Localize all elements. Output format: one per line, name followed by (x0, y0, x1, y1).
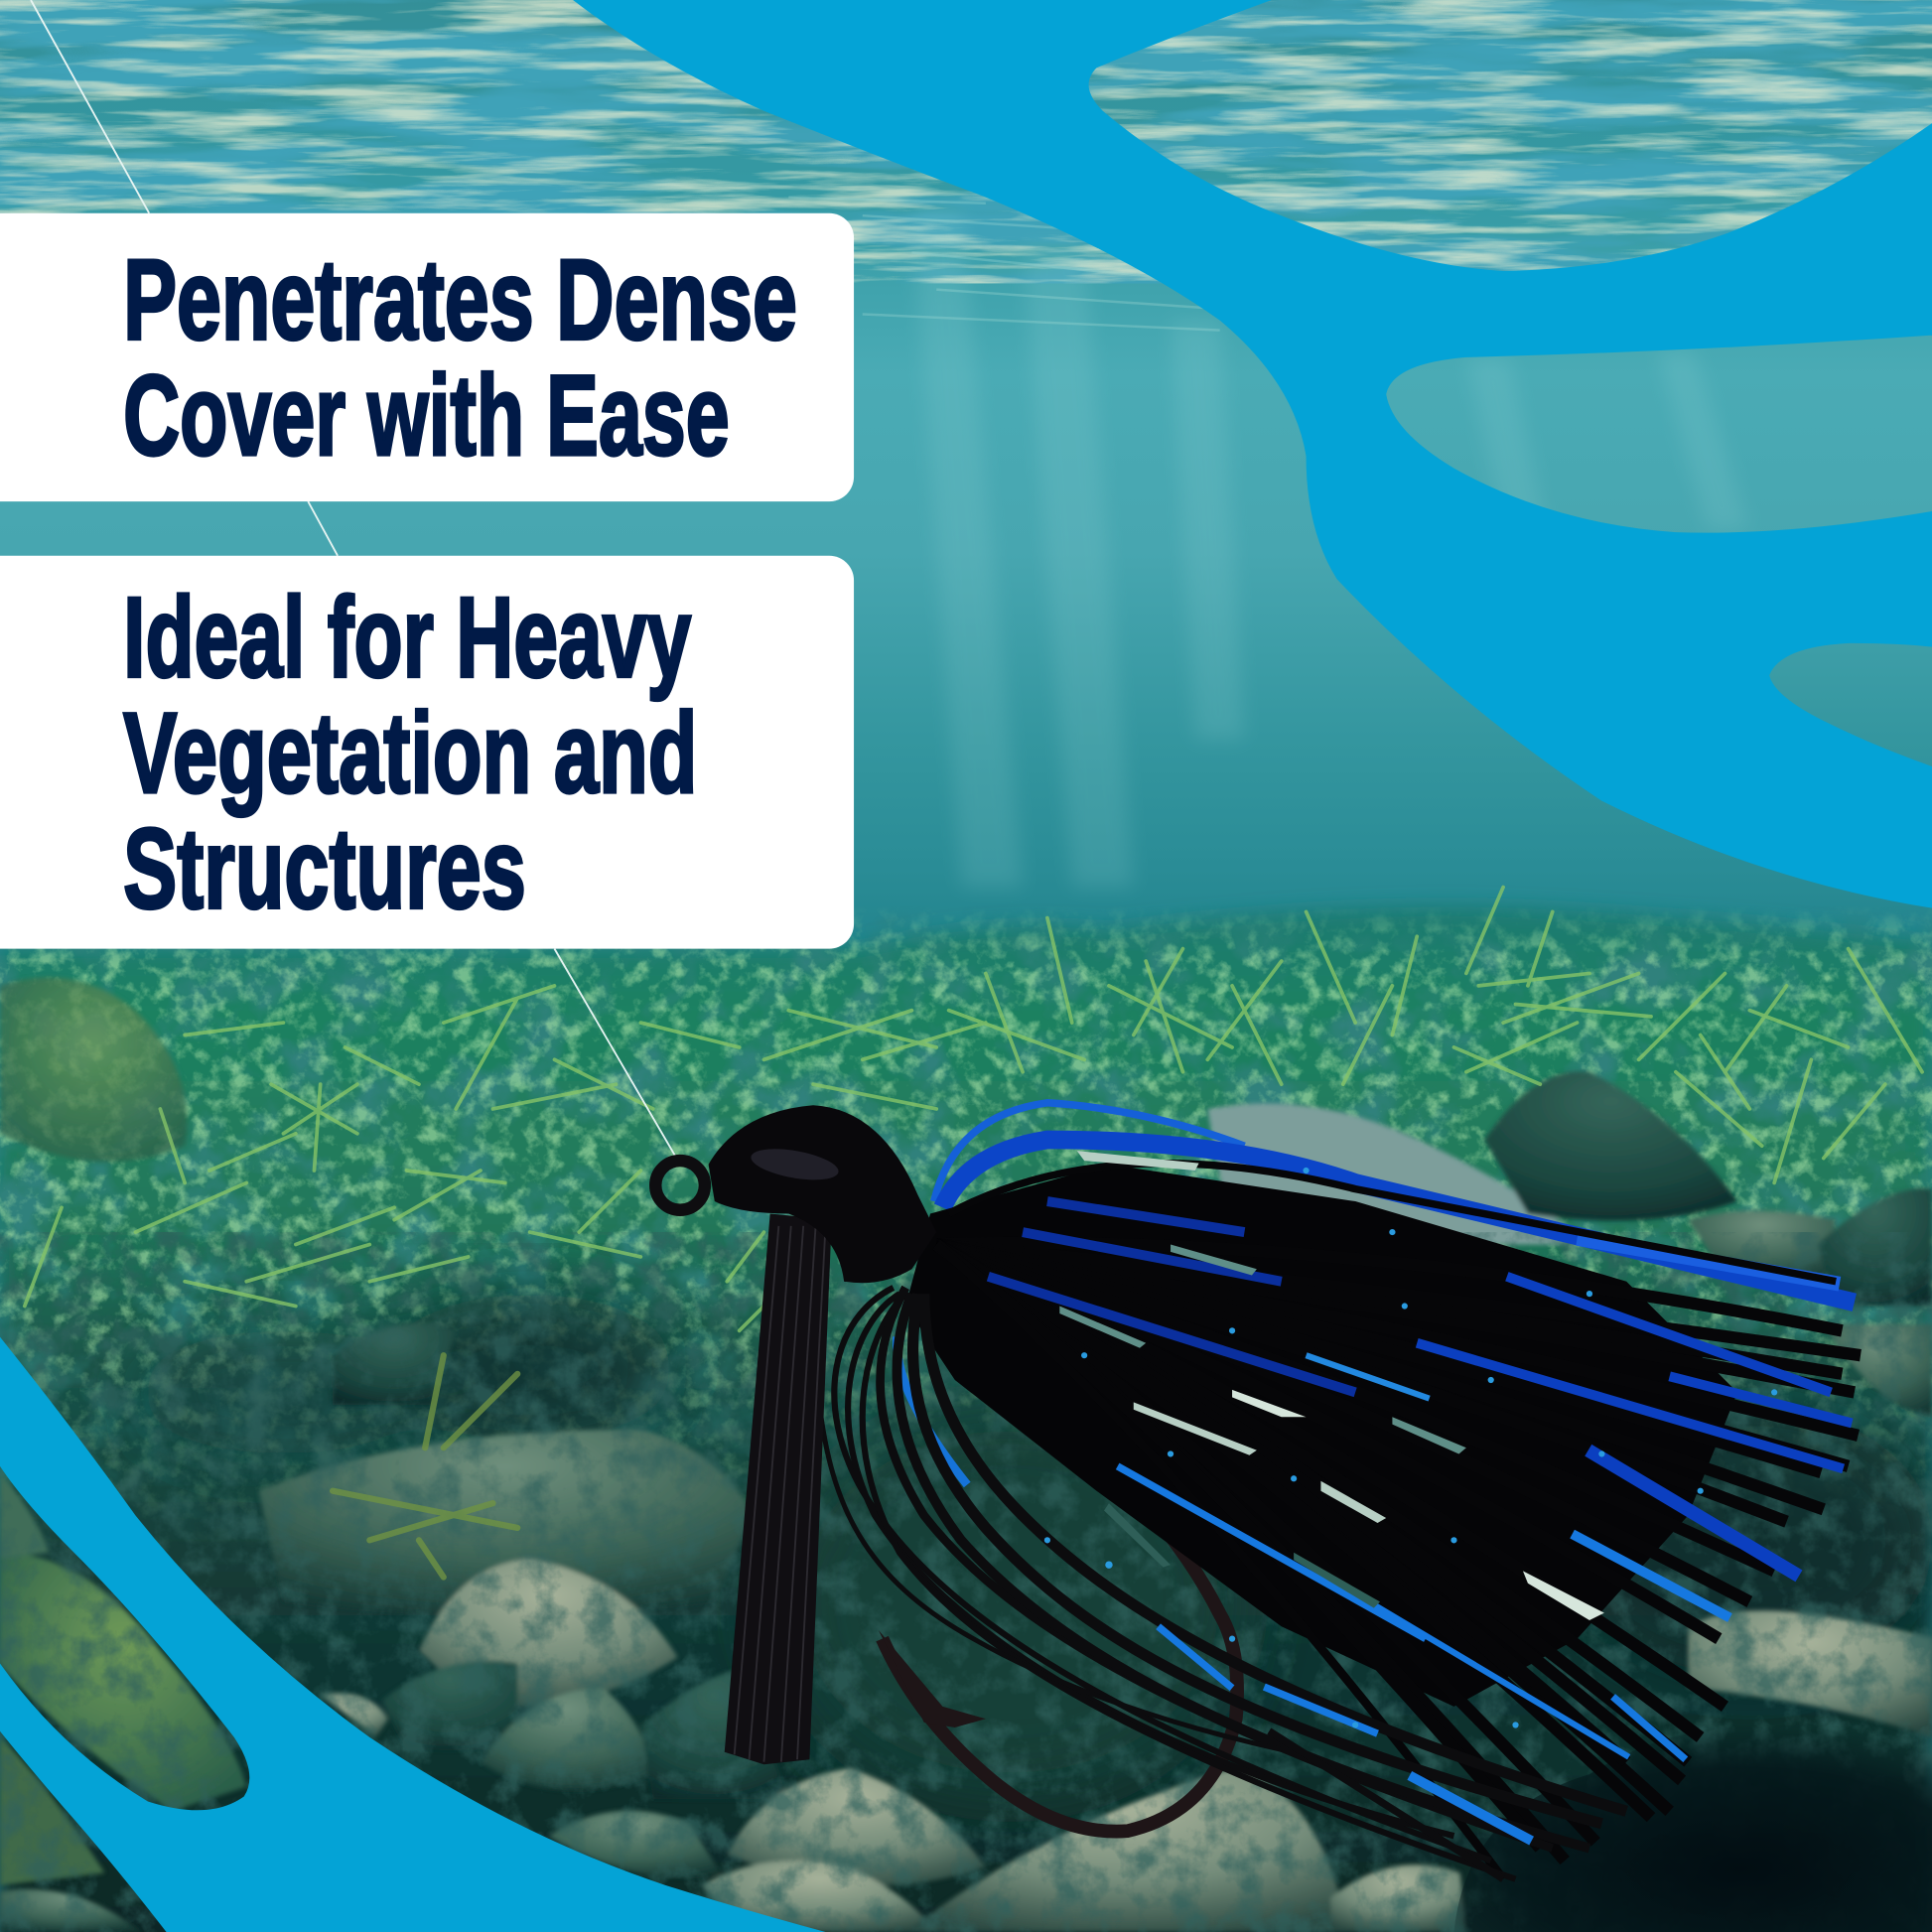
curved lower strands (819, 1288, 1626, 1879)
panel: second benefit (0, 556, 854, 949)
skirt speckles (1044, 1168, 1777, 1728)
jig head (709, 1105, 936, 1283)
seabed (0, 907, 1932, 1932)
black skirt core (905, 1165, 1737, 1707)
blue accent strands (988, 1201, 1852, 1841)
sun rays (911, 209, 1749, 888)
pale reflections below the surface (788, 198, 1220, 331)
heading: penetrates dense cover: Penetrates Dense (123, 236, 797, 363)
panel: first benefit (0, 213, 854, 501)
rocks (0, 978, 1932, 1932)
line eye (655, 1161, 705, 1210)
weed guard bristles (725, 1213, 832, 1764)
blue wave shape top right (573, 0, 1932, 908)
heading: penetrates dense cover: Cover with Ease (123, 352, 730, 480)
blue wave shape bottom left (0, 1337, 826, 1932)
water surface texture (0, 0, 1932, 277)
rock mottling (0, 1232, 1932, 1932)
top blue skirt strands (897, 1103, 1855, 1484)
hook (883, 1466, 1237, 1832)
dark hollows (136, 1294, 1932, 1799)
heading: ideal for heavy vegetation (123, 574, 697, 933)
heading: ideal for heavy vegetation: Vegetation and (123, 690, 697, 817)
background slivers between strands (1059, 1151, 1604, 1620)
heading: ideal for heavy vegetation: Ideal for Heavy (123, 574, 691, 701)
fishing line (31, 0, 680, 1165)
heading: ideal for heavy vegetation: Structures (123, 806, 526, 933)
dark water bottom right (1453, 1724, 1932, 1932)
jig head highlight (749, 1144, 841, 1185)
black skirt strands (936, 1164, 1861, 1879)
vegetation texture (0, 911, 1932, 1527)
heading: penetrates dense cover (123, 236, 797, 480)
hook barb (879, 1630, 986, 1727)
fishing jig lure (655, 1103, 1861, 1879)
aquatic plants (25, 888, 1922, 1578)
